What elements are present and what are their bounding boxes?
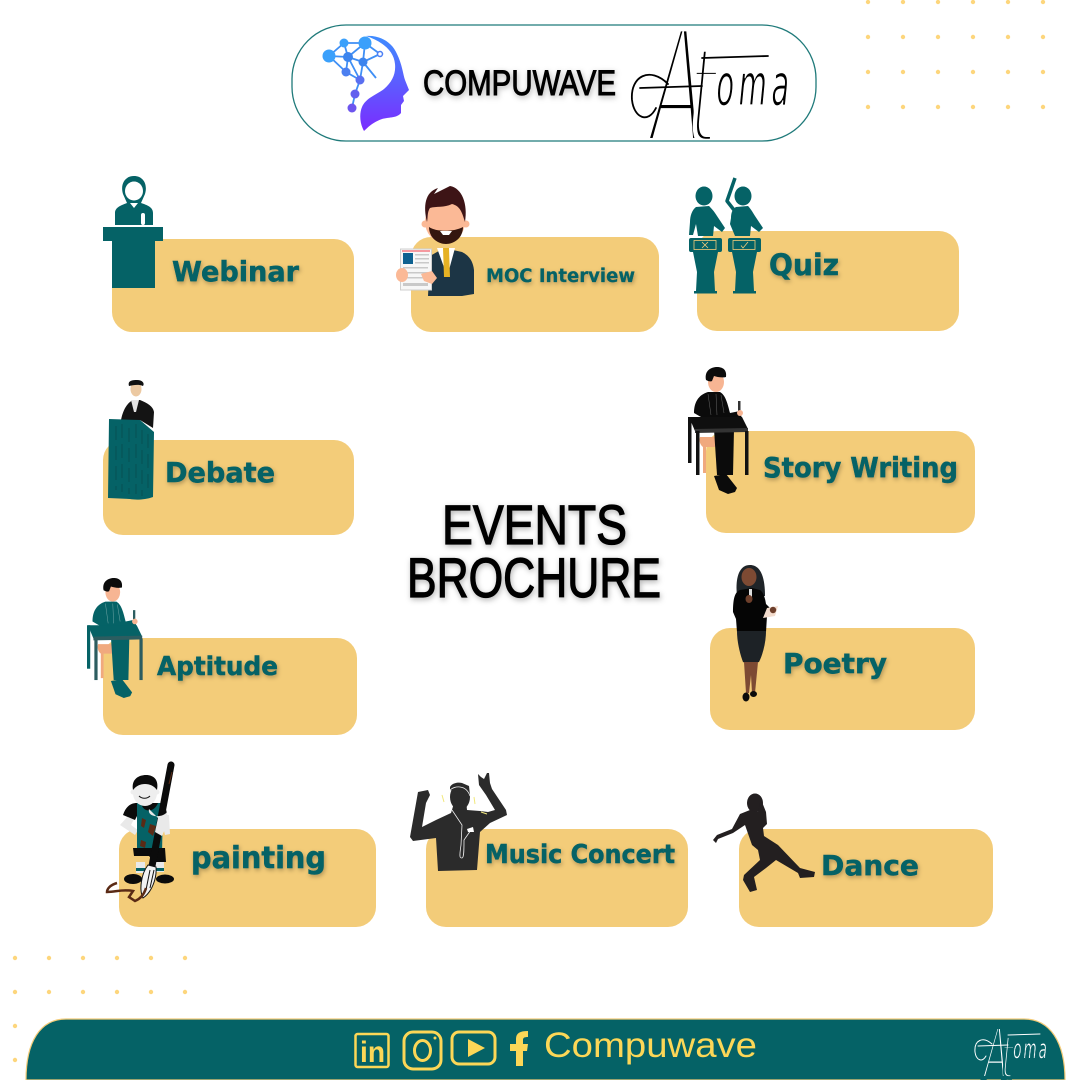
footer label: Compuwave: Compuwave xyxy=(544,1026,757,1065)
dot pattern: bottom left xyxy=(13,956,187,1062)
title: Events Brochure xyxy=(407,493,661,609)
logo script: Atoma: At xyxy=(650,0,716,181)
card: Dance xyxy=(713,794,993,927)
card: Music Concert xyxy=(410,773,688,927)
dot pattern: top right xyxy=(866,0,1045,109)
icon: Instagram xyxy=(404,1032,441,1069)
label: Music Concert: Music Concert xyxy=(485,840,675,870)
icon: Facebook xyxy=(510,1031,528,1066)
icon: debater at lectern xyxy=(108,380,154,500)
icon: silhouette listening to music xyxy=(410,773,507,871)
footer script: Atoma: oma xyxy=(1013,1034,1049,1066)
label: Poetry: Poetry xyxy=(783,647,887,680)
icon: bearded interviewer with resume xyxy=(396,186,474,296)
label: Aptitude: Aptitude xyxy=(157,652,278,682)
icon: YouTube xyxy=(452,1032,495,1064)
label: Quiz: Quiz xyxy=(769,248,839,282)
footer script: Atoma xyxy=(975,1015,1049,1080)
card: Quiz xyxy=(689,178,959,331)
card: painting xyxy=(107,765,376,927)
card: Poetry xyxy=(710,565,975,730)
label: Story Writing: Story Writing xyxy=(763,451,958,484)
card: MOC Interview xyxy=(396,186,659,332)
card: Debate xyxy=(103,380,354,535)
label: Webinar: Webinar xyxy=(172,255,299,288)
icon: speaker at podium xyxy=(103,176,163,288)
card: Webinar xyxy=(103,176,354,332)
logo icon: brain network and head xyxy=(322,36,409,131)
icon: student writing at desk, black xyxy=(688,367,748,494)
footer bar xyxy=(26,1015,1065,1080)
icon: quiz contestants at podiums xyxy=(689,178,763,294)
label: MOC Interview: MOC Interview xyxy=(486,266,635,287)
title: Events Brochure: EVENTS xyxy=(442,493,627,556)
label: Debate: Debate xyxy=(165,456,275,489)
icon: woman reciting with microphone xyxy=(733,565,778,702)
header logo panel xyxy=(292,0,816,181)
icon: LinkedIn: in xyxy=(360,1036,385,1069)
label: painting: painting xyxy=(191,841,326,876)
label: Dance: Dance xyxy=(821,849,919,882)
logo wordmark: Compuwave: COMPUWAVE xyxy=(423,64,616,103)
icon: student writing at desk, teal xyxy=(87,578,143,698)
icon: child with giant paintbrush xyxy=(107,765,174,901)
icon: dancer silhouette xyxy=(713,794,815,892)
logo script: Atoma: oma xyxy=(716,51,794,119)
logo script: Atoma xyxy=(632,0,794,181)
card: Aptitude xyxy=(87,578,357,735)
card: Story Writing xyxy=(688,367,975,533)
title: Events Brochure: BROCHURE xyxy=(407,546,661,609)
